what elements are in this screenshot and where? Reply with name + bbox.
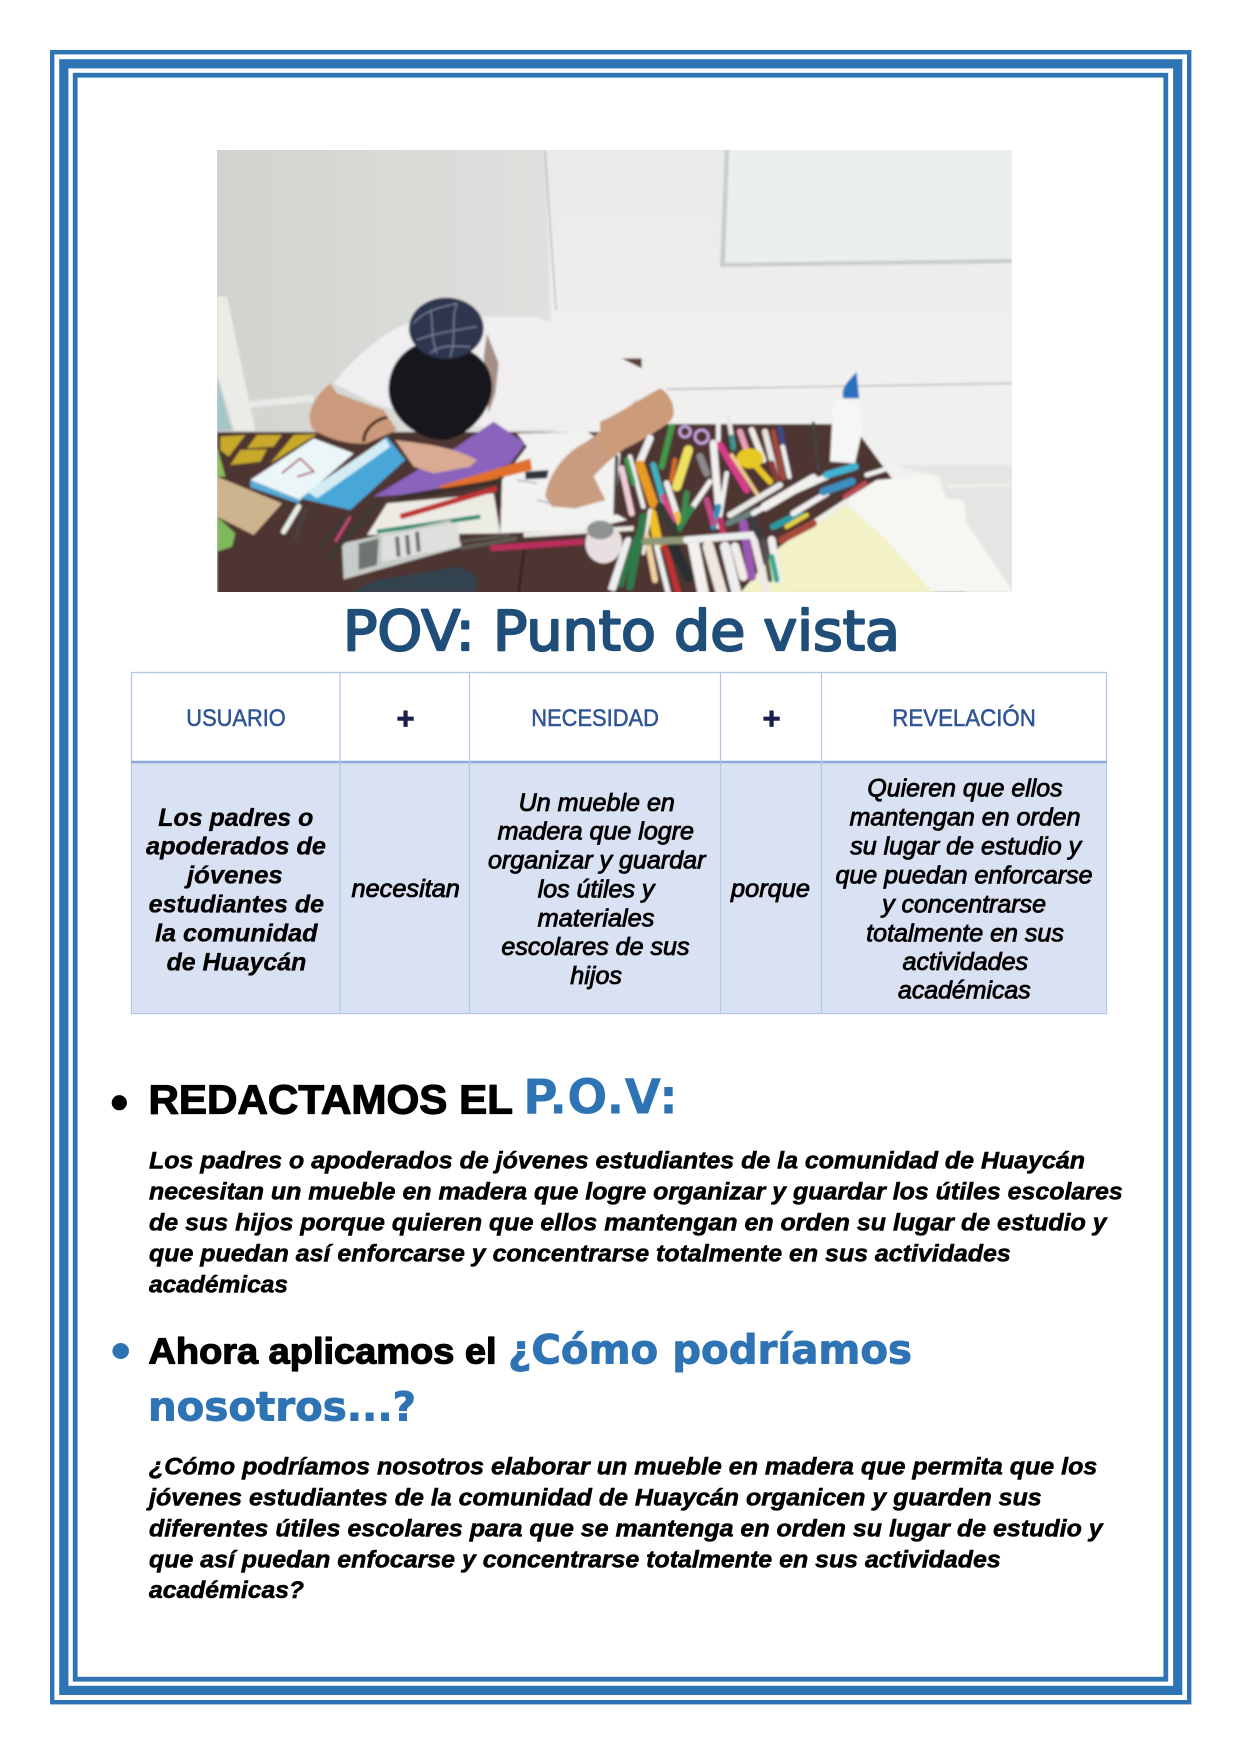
cell: necesidad — [488, 789, 707, 990]
paragraph: how might we statement: ¿Cómo podríamos nosotros elaborar un mueble en madera que permita que los — [149, 1453, 1097, 1480]
cell: necesidad: organizar y guardar — [488, 846, 707, 874]
heading: como podriamos nosotros — [112, 1327, 912, 1431]
cell: necesidad: Un mueble en — [519, 789, 675, 817]
paragraph: how might we statement: diferentes útiles escolares para que se mantenga en orden su lugar de estudio y — [149, 1515, 1104, 1542]
paragraph: POV statement: que puedan así enforcarse y concentrarse totalmente en sus actividades — [149, 1240, 1011, 1267]
cell: usuario: apoderados de — [146, 832, 326, 860]
heading text: REDACTAMOS EL — [148, 1076, 513, 1122]
paragraph: how might we statement — [146, 1453, 1104, 1604]
table header row: USUARIO — [186, 705, 286, 732]
bullet: black — [112, 1095, 127, 1110]
cell: necesitan: necesitan — [352, 875, 460, 903]
heading text — [148, 1327, 912, 1431]
cell: necesidad: hijos — [570, 962, 622, 990]
heading text: ¿Cómo podríamos — [508, 1327, 912, 1373]
cell: revelacion: académicas — [898, 976, 1031, 1004]
paragraph: how might we statement: jóvenes estudiantes de la comunidad de Huaycán organicen y guarden sus — [146, 1484, 1042, 1511]
cell: revelacion: su lugar de estudio y — [850, 832, 1083, 860]
paragraph: POV statement: Los padres o apoderados de jóvenes estudiantes de la comunidad de Huaycán — [149, 1147, 1085, 1174]
cell: necesidad: madera que logre — [498, 818, 694, 846]
cell: necesidad: materiales — [538, 904, 654, 932]
table grid — [131, 672, 1107, 1014]
heading text: nosotros...? — [148, 1385, 416, 1431]
cell: revelacion: y concentrarse — [880, 890, 1046, 918]
table header row — [186, 701, 1036, 736]
cell: revelacion: Quieren que ellos — [867, 774, 1063, 802]
paragraph: POV statement: de sus hijos porque quieren que ellos mantengan en orden su lugar de estudio y — [149, 1210, 1108, 1236]
heading: redactamos el P.O.V — [112, 1069, 678, 1125]
heading text: P.O.V: — [523, 1069, 678, 1125]
cell: revelacion: totalmente en sus — [866, 920, 1064, 948]
title: POV: Punto de vista — [343, 599, 900, 663]
cell: usuario — [146, 804, 326, 976]
cell: porque: porque — [730, 875, 810, 903]
cell: usuario: jóvenes — [184, 862, 283, 890]
cell: revelacion: que puedan enforcarse — [836, 862, 1092, 890]
cell: usuario: de Huaycán — [167, 948, 306, 976]
cell: necesidad: los útiles y — [538, 876, 656, 904]
table header row: + — [762, 701, 781, 736]
paragraph: how might we statement: que así puedan enfocarse y concentrarse totalmente en sus actividades — [149, 1546, 1001, 1573]
cell: revelacion: mantengan en orden — [850, 804, 1080, 832]
paragraph: POV statement: necesitan un mueble en madera que logre organizar y guardar los útiles escolares — [149, 1178, 1123, 1205]
cell: usuario: la comunidad — [155, 920, 318, 948]
cell: revelacion — [836, 774, 1092, 1004]
markers scattered across the desk — [613, 417, 893, 593]
paragraph: POV statement: académicas — [149, 1271, 288, 1298]
heading text — [148, 1069, 678, 1125]
cell: usuario: Los padres o — [158, 804, 313, 832]
table header row: REVELACIÓN — [892, 705, 1036, 732]
POV table — [131, 672, 1107, 1014]
lower-left part of the photo — [217, 297, 314, 431]
heading text: Ahora aplicamos el — [148, 1330, 496, 1371]
paragraph: POV statement — [149, 1147, 1123, 1298]
table header row: NECESIDAD — [531, 705, 659, 732]
table header row: + — [396, 701, 415, 736]
desk top — [217, 424, 1012, 600]
cell: revelacion: actividades — [902, 948, 1028, 976]
paragraph: how might we statement: académicas? — [149, 1577, 304, 1604]
cell: usuario: estudiantes de — [149, 890, 324, 918]
photo: student asleep on a desk covered in markers — [210, 140, 1020, 600]
bullet: blue — [112, 1343, 129, 1359]
cell: necesidad: escolares de sus — [501, 933, 690, 961]
